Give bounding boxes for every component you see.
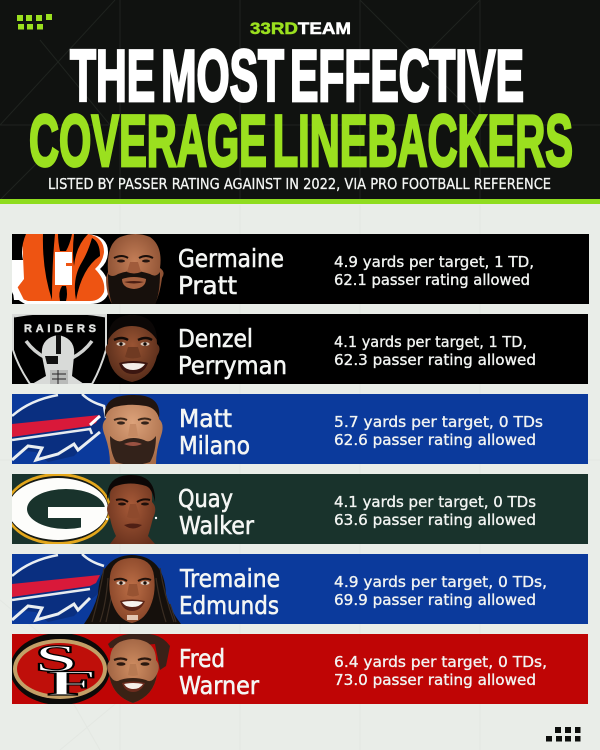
photo: Germaine Pratt [106, 234, 164, 304]
header accent line [0, 199, 600, 204]
icon: Bills logo [12, 394, 106, 462]
name: Perryman [178, 351, 287, 380]
stats [334, 573, 547, 609]
stats: 6.4 yards per target, 0 TDs, [334, 653, 547, 671]
icon: Bills logo [12, 554, 106, 622]
name: Fred [179, 644, 225, 673]
brand: 33RDTEAM: 33RD TEAM [250, 20, 351, 38]
icon: bottom-right dots [546, 727, 580, 742]
icon: 49ers logo: F [47, 663, 97, 703]
stats [334, 333, 536, 369]
photo: Denzel Perryman [106, 315, 160, 382]
name [178, 244, 284, 300]
stats: 62.1 passer rating allowed [334, 271, 530, 289]
stats: 5.7 yards per target, 0 TDs [334, 413, 543, 431]
name: Milano [179, 431, 250, 460]
stats: 62.6 passer rating allowed [334, 431, 536, 449]
name: Germaine [178, 244, 284, 273]
icon: Raiders logo [13, 312, 106, 384]
stats: 63.6 passer rating allowed [334, 511, 536, 529]
name: Warner [179, 671, 260, 700]
stats: 73.0 passer rating allowed [334, 671, 536, 689]
name: Walker [179, 511, 255, 540]
icon: top-left dots [17, 14, 52, 30]
icon: Bengals logo [12, 234, 108, 304]
name: Edmunds [179, 591, 279, 620]
name [179, 564, 280, 620]
name: Tremaine [179, 564, 280, 593]
photo: Matt Milano [103, 395, 163, 465]
row: Matt Milano [12, 394, 588, 465]
name: Pratt [178, 271, 237, 300]
name [179, 404, 250, 460]
header band [0, 0, 600, 204]
stats [334, 413, 543, 449]
photo: Fred Warner [107, 634, 170, 703]
row: Quay Walker [5, 473, 588, 545]
icon: 49ers logo: S [35, 638, 77, 680]
name: Denzel [178, 324, 253, 353]
name: Quay [178, 484, 233, 513]
stats [334, 253, 534, 289]
stats: 4.9 yards per target, 0 TDs, [334, 573, 547, 591]
name: Matt [179, 404, 232, 433]
name [178, 324, 287, 380]
stats: 62.3 passer rating allowed [334, 351, 536, 369]
row: Germaine Pratt [12, 234, 589, 304]
row: Denzel Perryman [12, 312, 588, 384]
row: Tremaine Edmunds [12, 554, 588, 624]
name [178, 484, 255, 540]
name [179, 644, 260, 700]
icon: 49ers logo [10, 633, 110, 705]
stats [334, 493, 536, 529]
stats: 4.1 yards per target, 1 TD, [334, 333, 527, 351]
row: Fred Warner [10, 633, 588, 705]
photo: Quay Walker [106, 475, 157, 544]
stats: 4.1 yards per target, 0 TDs [334, 493, 536, 511]
photo: Tremaine Edmunds [84, 555, 181, 624]
stats: 69.9 passer rating allowed [334, 591, 536, 609]
stats [334, 653, 547, 689]
stats: 4.9 yards per target, 1 TD, [334, 253, 534, 271]
icon: Packers logo [12, 474, 110, 544]
icon: Raiders logo: RAIDERS [24, 323, 96, 335]
